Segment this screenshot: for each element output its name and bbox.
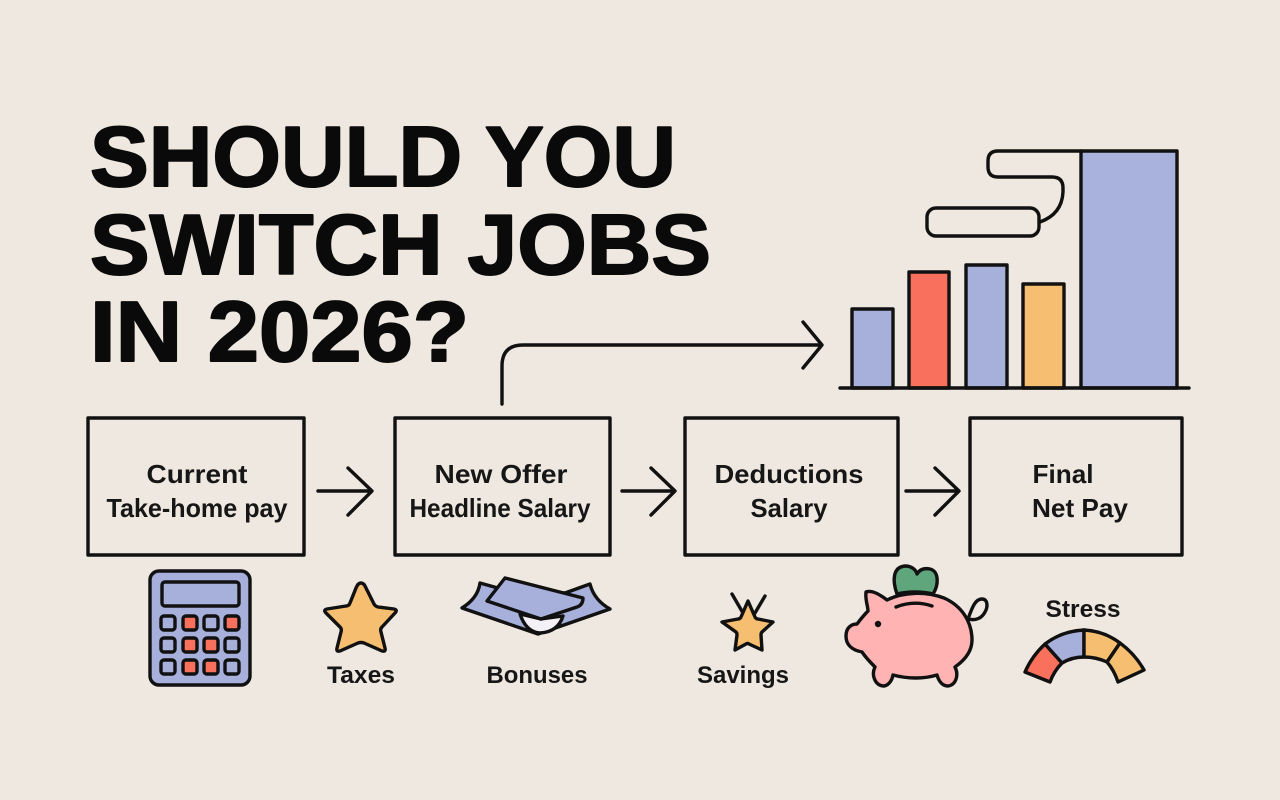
icon: stress gauge [1025, 630, 1144, 682]
icon: calculator [150, 571, 250, 685]
flow box: final net pay: Final [1032, 459, 1094, 489]
arrow: new offer to chart [502, 322, 822, 404]
flow box: current take-home pay: Take-home pay [106, 493, 288, 523]
pig tail [968, 599, 987, 620]
bar: orange [1023, 284, 1064, 388]
pig body [846, 591, 972, 686]
label: bonuses: Bonuses [486, 662, 588, 689]
flow box: new offer headline salary [395, 418, 610, 555]
title: IN 2026? [90, 285, 469, 380]
arrow: step 3 to step 4 [906, 468, 959, 515]
bar chart [840, 151, 1189, 388]
flow box: current take-home pay [88, 418, 304, 555]
icon: taxes star [325, 583, 396, 651]
flow box: current take-home pay: Current [146, 459, 248, 489]
label: savings: Savings [697, 662, 789, 689]
icon: piggy bank [846, 566, 987, 686]
bar: tall blue [1081, 151, 1177, 388]
connector callout outline [927, 151, 1081, 236]
title: SHOULD YOU [90, 110, 676, 205]
flow box: new offer headline salary: New Offer [434, 459, 568, 489]
title [90, 110, 711, 380]
coin slot [896, 603, 932, 607]
arrow: step 1 to step 2 [318, 468, 372, 515]
flow box: new offer headline salary: Headline Salary [410, 493, 591, 523]
flow box: final net pay: Net Pay [1032, 493, 1129, 523]
flow box: deductions salary: Salary [750, 493, 828, 523]
flow box: deductions salary [685, 418, 898, 555]
label: stress: Stress [1046, 596, 1120, 623]
bar: second blue [966, 265, 1007, 388]
bar: red [909, 272, 949, 388]
arrow: step 2 to step 3 [622, 468, 675, 515]
chart baseline [840, 386, 1189, 390]
flow box: final net pay [970, 418, 1182, 555]
icon: bonuses cash [462, 578, 610, 634]
pig eye [875, 621, 881, 627]
icon: green heart [894, 566, 937, 594]
icon: savings star [722, 594, 773, 650]
flow box: deductions salary: Deductions [714, 459, 864, 489]
title: SWITCH JOBS [90, 198, 711, 293]
label: taxes: Taxes [327, 662, 395, 689]
bar: first blue [852, 309, 893, 388]
